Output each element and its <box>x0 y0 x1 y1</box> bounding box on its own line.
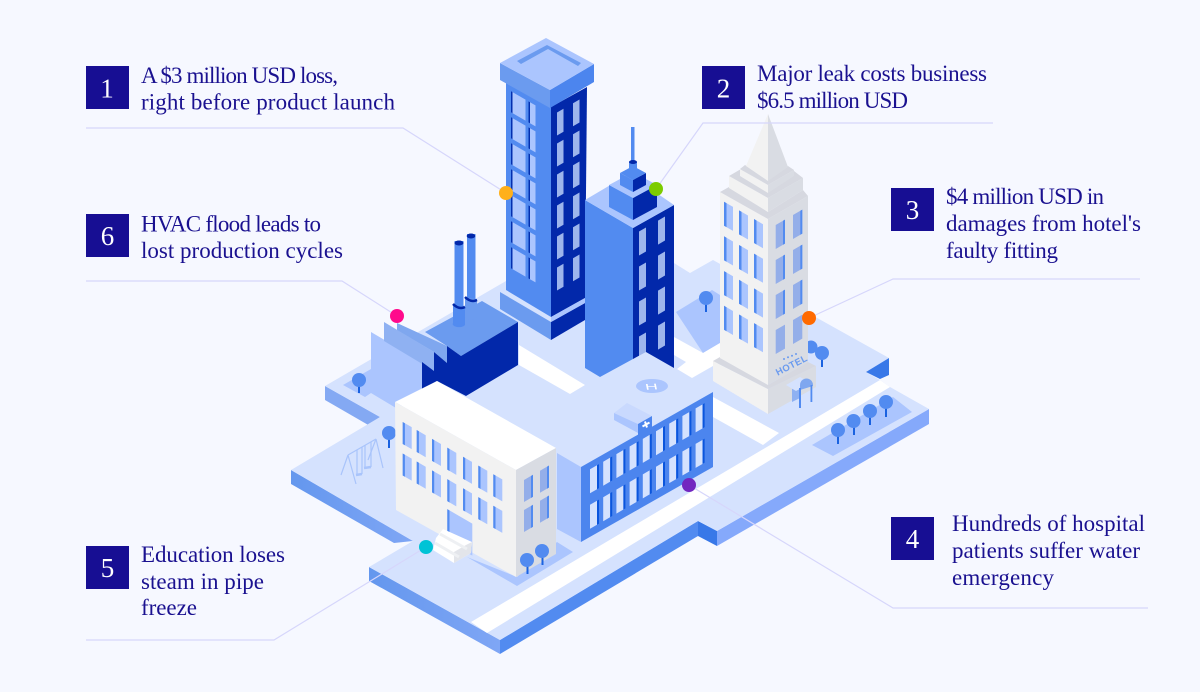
hotel base <box>713 357 816 414</box>
leader line 2 <box>656 123 993 189</box>
hotel entrance <box>786 377 813 408</box>
marker 5 <box>419 540 433 554</box>
text 5: freeze <box>141 595 197 620</box>
planting bed at school <box>467 542 573 586</box>
number 2: 2 <box>717 74 730 104</box>
tower 1 roof <box>500 38 594 108</box>
text 3: damages from hotel's <box>946 211 1141 236</box>
main road <box>471 380 890 633</box>
text 3: $4 million USD in <box>946 184 1104 209</box>
swing set <box>341 439 383 484</box>
text 6: HVAC flood leads to <box>141 212 321 236</box>
planting bed left <box>343 369 371 397</box>
isometric city illustration <box>291 38 929 654</box>
text 2: Major leak costs business <box>757 61 987 86</box>
callout 5 <box>86 540 433 640</box>
smokestacks <box>453 234 477 327</box>
tower 1 left windows <box>511 91 536 282</box>
badge 2 <box>702 66 745 109</box>
number 6: 6 <box>101 221 114 251</box>
school trees <box>520 544 549 574</box>
planting bed right <box>812 397 912 456</box>
factory <box>371 234 518 408</box>
number 4: 4 <box>906 524 920 554</box>
hospital <box>557 379 713 542</box>
hotel <box>713 114 816 414</box>
leader line 5 <box>86 547 426 640</box>
hospital roof <box>430 352 713 467</box>
school right windows <box>524 466 549 532</box>
school steps <box>433 529 472 563</box>
helipad <box>636 379 668 393</box>
text 4: emergency <box>952 565 1054 590</box>
leader line 3 <box>809 279 1140 318</box>
callout 4 <box>682 478 1148 608</box>
ground plate <box>291 260 929 654</box>
school <box>395 381 556 577</box>
number 1: 1 <box>100 74 114 104</box>
tower 1 right windows <box>557 100 580 291</box>
hospital windows <box>590 403 705 529</box>
badge 1 <box>86 66 129 109</box>
leader line 6 <box>86 281 397 316</box>
text 4: patients suffer water <box>952 538 1140 563</box>
text 6: lost production cycles <box>141 238 343 263</box>
text 2: $6.5 million USD <box>757 88 908 113</box>
text 5: Education loses <box>141 542 285 567</box>
marker 2 <box>649 182 663 196</box>
hotel right windows <box>776 210 802 354</box>
school left windows <box>403 422 502 533</box>
leader line 1 <box>86 128 506 193</box>
hospital roof box with cross <box>614 403 652 436</box>
marker 4 <box>682 478 696 492</box>
badge 6 <box>86 214 129 257</box>
text 3: faulty fitting <box>946 238 1058 263</box>
text 1: right before product launch <box>141 90 396 114</box>
hotel left windows <box>724 202 763 352</box>
callout 2 <box>649 61 993 196</box>
badge 4 <box>891 517 934 560</box>
tower 1 <box>500 38 594 340</box>
spire <box>746 114 788 181</box>
text 4: Hundreds of hospital <box>952 511 1145 536</box>
marker 6 <box>390 309 404 323</box>
antenna <box>629 127 637 174</box>
leader line 4 <box>689 485 1148 608</box>
tower 2 windows <box>639 217 665 361</box>
callout 1 <box>86 63 513 200</box>
helipad: H <box>644 382 659 392</box>
marker 3 <box>802 311 816 325</box>
tower 2 <box>585 127 674 380</box>
text 5: steam in pipe <box>141 569 264 594</box>
callout 6 <box>86 212 404 323</box>
planting bed near tree <box>676 290 720 353</box>
side road by hospital <box>713 397 779 445</box>
tree behind hotel <box>804 340 818 354</box>
callout 3 <box>802 184 1141 325</box>
number 3: 3 <box>906 195 919 225</box>
road between towers and hospital <box>519 345 585 394</box>
number 5: 5 <box>101 553 114 583</box>
trees <box>352 291 893 448</box>
text 1: A $3 million USD loss, <box>141 63 338 88</box>
badge 3 <box>891 188 934 231</box>
badge 5 <box>86 546 129 589</box>
marker 1 <box>499 186 513 200</box>
school door <box>447 509 472 556</box>
side road near tower <box>674 337 720 378</box>
hotel sign: HOTEL <box>774 353 810 378</box>
